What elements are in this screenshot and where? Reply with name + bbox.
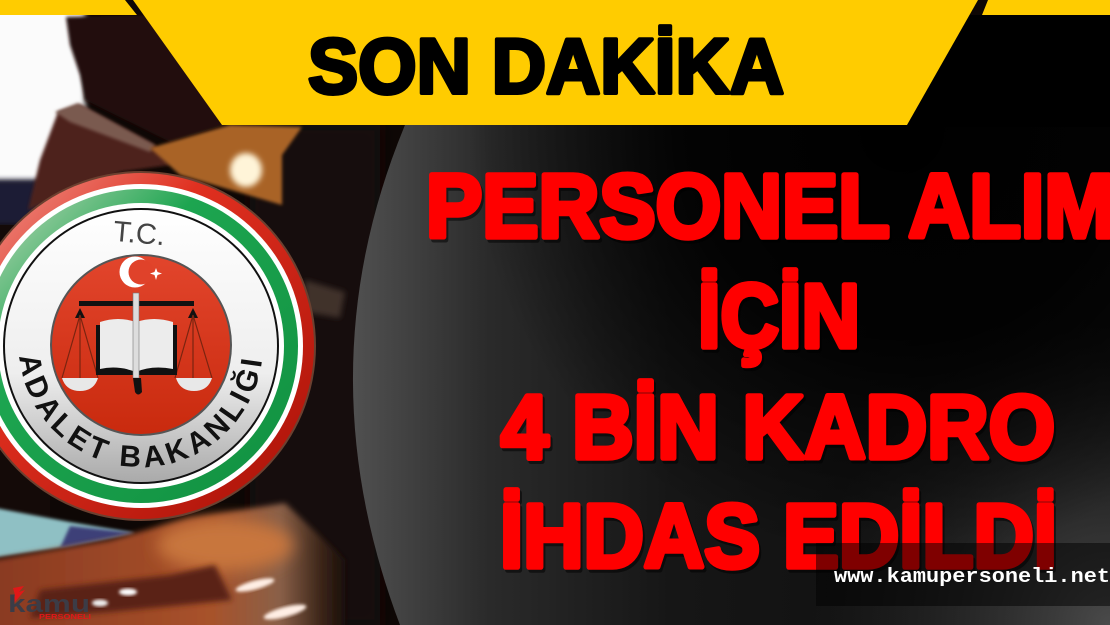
- dark rounded panel: [353, 15, 1110, 625]
- heading: SON DAKİKA: SON DAKİKA: [308, 22, 784, 110]
- emblem: book and sword: [96, 293, 177, 394]
- yellow banner: [133, 0, 978, 125]
- watermark logo: kamu personeli: [8, 586, 91, 621]
- website strip: [816, 543, 1110, 606]
- headline: personel alımı için 4 bin kadro ihdas edildi: [426, 157, 1110, 590]
- website url: www.kamupersoneli.net: [834, 566, 1110, 589]
- headline line 4: İHDAS EDİLDİ: [500, 487, 1057, 587]
- headline line 3: 4 BİN KADRO: [501, 378, 1055, 478]
- headline shadows: İÇİN: [700, 270, 862, 370]
- headline line 2: İÇİN: [698, 267, 860, 367]
- emblem: scales: [62, 301, 212, 391]
- headline shadows: 4 BİN KADRO: [503, 381, 1057, 481]
- watermark logo: kamu personeli: PERSONELI: [39, 614, 91, 621]
- emblem: crescent and star: [120, 256, 162, 288]
- seal: Adalet Bakanlığı: [0, 171, 316, 521]
- top yellow strips: [0, 0, 1110, 15]
- watermark logo: kamu personeli: kamu: [8, 591, 90, 618]
- seal text: T.C.: T.C.: [112, 216, 166, 252]
- headline shadows: İHDAS EDİLDİ: [502, 490, 1059, 590]
- headline shadows: [428, 160, 1110, 590]
- seal text: ADALET BAKANLIĞI: ADALET BAKANLIĞI: [19, 357, 262, 468]
